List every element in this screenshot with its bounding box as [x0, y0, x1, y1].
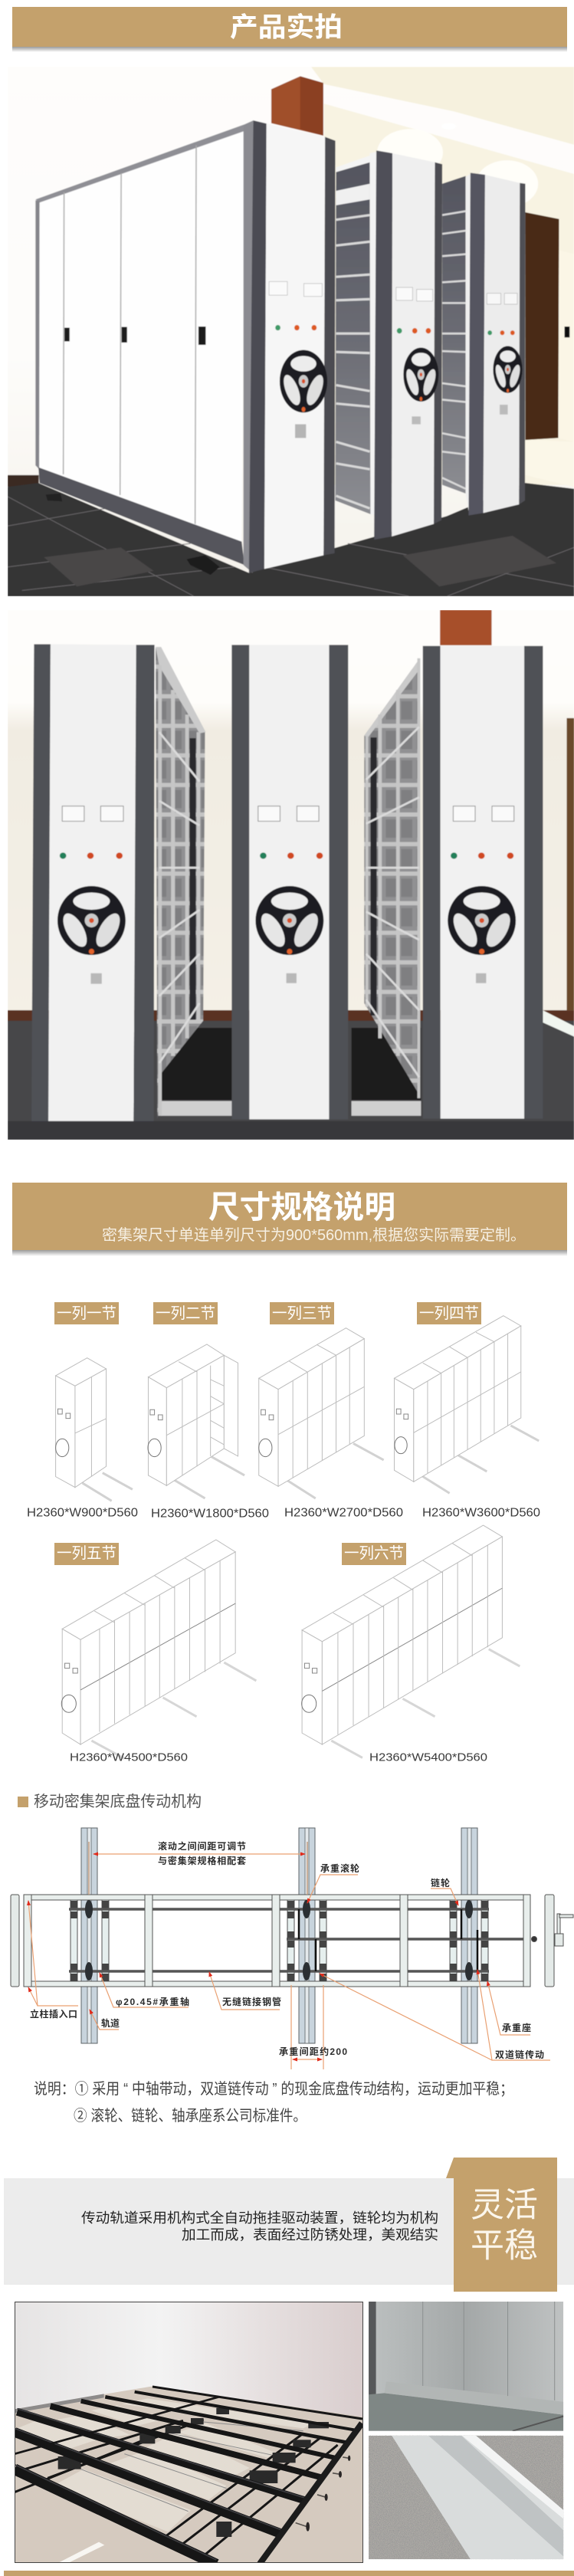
annotation texts	[30, 1840, 544, 2060]
chains	[299, 1909, 477, 1971]
feature banner	[4, 2158, 574, 2292]
size captions row 1: H2360*W3600*D560	[422, 1507, 540, 1519]
one-section cabinet	[56, 1358, 107, 1488]
bearing columns	[71, 1900, 488, 1981]
four-section cabinet	[394, 1316, 521, 1482]
line drawings: cabinets row 1	[56, 1316, 539, 1501]
annotation texts: φ20.45#承重轴	[116, 1996, 189, 2007]
annotation texts: 承重滚轮	[320, 1862, 359, 1874]
feature banner: 平稳	[471, 2227, 538, 2264]
heading: 产品实拍: 产品实拍	[230, 12, 343, 43]
size labels row 1: 一列三节	[272, 1304, 332, 1322]
bottom gold bar	[4, 2571, 574, 2576]
feature banner: 加工而成，表面经过防锈处理，美观结实	[182, 2227, 438, 2243]
right end beam	[260, 2423, 362, 2564]
rails	[81, 1828, 477, 2043]
main cabinet	[40, 421, 242, 541]
subtitle: 密集架尺寸单连单列尺寸为900*560mm,根据您实际需要定制。	[102, 1226, 526, 1244]
size captions row 1	[27, 1507, 540, 1521]
annotation texts: 承重间距约200	[279, 2046, 347, 2057]
photo: cabinet base on floor	[369, 2302, 563, 2431]
annotation texts: 承重座	[502, 2022, 531, 2033]
description text	[34, 2080, 513, 2125]
size captions row 2	[70, 1751, 487, 1764]
size labels row 2	[54, 1543, 406, 1565]
cross rails	[15, 2420, 338, 2555]
second cabinet	[336, 162, 370, 514]
header: product photos	[12, 7, 567, 52]
size labels row 1: 一列二节	[156, 1304, 215, 1322]
size captions row 1: H2360*W1800*D560	[151, 1507, 269, 1521]
cabinet A	[31, 645, 51, 1121]
size captions row 1: H2360*W900*D560	[27, 1507, 138, 1519]
rollers	[85, 1900, 473, 1980]
gaps	[157, 1028, 232, 1100]
annotation texts: 滚动之间间距可调节	[158, 1840, 246, 1852]
cabinet C	[423, 646, 441, 1119]
heading: 尺寸规格说明: 尺寸规格说明	[208, 1190, 395, 1225]
annotation texts: 与密集架规格相配套	[158, 1855, 246, 1866]
banner title: 灵活	[471, 2186, 538, 2224]
annotation texts: 轨道	[101, 2017, 120, 2029]
size captions row 1: H2360*W2700*D560	[284, 1507, 403, 1519]
photo: installed steel base frame	[15, 2302, 363, 2565]
third cabinet	[442, 176, 466, 494]
banner description: 传动轨道采用机构式全自动拖挂驱动装置，链轮均为机构	[81, 2210, 438, 2226]
two-section cabinet	[148, 1344, 238, 1485]
annotation texts: 双道链传动	[495, 2049, 544, 2060]
diagram: chassis drive mechanism	[11, 1828, 573, 2069]
line drawings: cabinets row 2	[61, 1525, 520, 1758]
photo: mobile shelving angled view	[8, 67, 574, 596]
annotation texts: 链轮	[431, 1877, 450, 1889]
size labels row 2: 一列六节	[344, 1544, 404, 1562]
three-section cabinet	[259, 1328, 364, 1486]
crank handle	[532, 1914, 573, 1946]
size captions row 2: H2360*W4500*D560	[70, 1751, 188, 1764]
size labels row 1	[54, 1302, 481, 1324]
header: size specification	[12, 1183, 567, 1256]
annotation texts: 无缝链接钢管	[222, 1996, 281, 2007]
levelling knobs	[296, 2457, 349, 2527]
shelf side left	[156, 648, 205, 1119]
shafts	[69, 1909, 523, 1971]
long beams	[15, 2387, 362, 2565]
floor tile lines	[8, 497, 574, 596]
back brown cabinet	[525, 212, 559, 440]
floor	[15, 2386, 363, 2565]
section heading: chassis drive mechanism: 移动密集架底盘传动机构	[34, 1793, 202, 1810]
six-section cabinet	[302, 1525, 502, 1744]
photo: mobile shelving front view	[8, 610, 574, 1140]
five-section cabinet	[61, 1540, 235, 1744]
frame	[11, 1895, 554, 1987]
shelf side right	[364, 658, 420, 1094]
thin cross beam	[15, 2397, 219, 2454]
size captions row 2: H2360*W5400*D560	[369, 1751, 487, 1764]
bright channels between beams	[17, 2398, 313, 2532]
annotation leaders	[28, 1842, 550, 2069]
size labels row 1: 一列四节	[419, 1304, 479, 1322]
wood column	[271, 76, 323, 136]
size labels row 2: 一列五节	[57, 1544, 116, 1562]
size labels row 1: 一列一节	[57, 1304, 116, 1322]
cabinet B	[231, 645, 249, 1119]
annotation texts: 立柱插入口	[30, 2008, 77, 2020]
description text: ② 滚轮、链轮、轴承座系公司标准件。	[74, 2107, 307, 2125]
photo: floor track on carpet	[369, 2436, 563, 2559]
description text: 说明：① 采用 “ 中轴带动，双道链传动 ” 的现金底盘传动结构，运动更加平稳；	[34, 2080, 513, 2098]
